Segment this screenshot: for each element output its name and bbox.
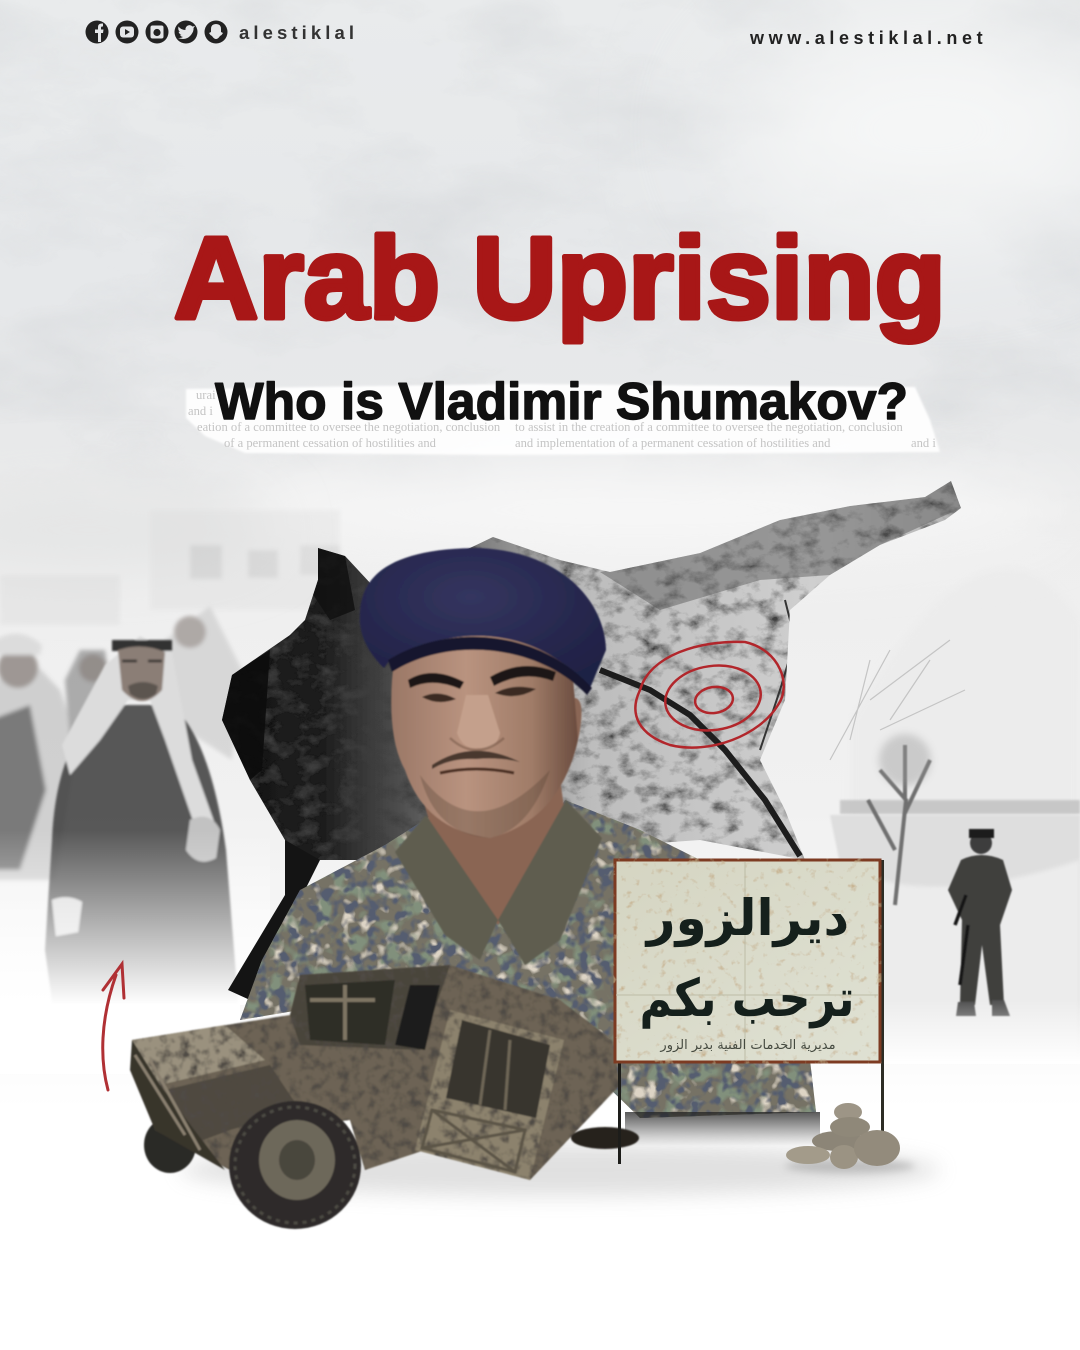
moustache and mouth <box>432 751 520 769</box>
windshield frames <box>305 980 395 1045</box>
front grille <box>130 1040 225 1170</box>
background <box>0 0 1080 920</box>
destroyed humvee <box>130 965 639 1229</box>
collar <box>395 800 602 965</box>
white brush strip with faded article text: to assist in the creation of a committee to oversee the negotiation, conclusion <box>515 420 904 434</box>
white brush strip with faded article text: and i <box>911 436 936 450</box>
uniform <box>240 800 816 1118</box>
subtitle: Who is Vladimir Shumakov? <box>215 373 908 431</box>
rear wheel <box>144 1117 196 1173</box>
icon: youtube <box>116 20 138 44</box>
website url: www.alestiklal.net <box>749 28 987 48</box>
icon: instagram <box>146 20 168 44</box>
faded crowd in traditional dress <box>0 606 270 1074</box>
white brush strip with faded article text: urai <box>196 388 216 402</box>
stubble <box>420 770 550 838</box>
sign text line 1: ديرالزور <box>644 889 849 948</box>
faded buildings behind crowd <box>0 510 340 625</box>
ear <box>562 698 582 760</box>
white brush strip with faded article text: and i <box>188 404 213 418</box>
white brush strip with faded article text: and implementation of a permanent cessation of hostilities and <box>515 436 831 450</box>
white brush strip with faded article text: eation of a committee to oversee the negotiation, conclusion <box>197 420 501 434</box>
road sign: Deir ez-Zor welcomes you <box>615 860 884 1164</box>
door window <box>446 1020 550 1118</box>
title: Arab Uprising <box>174 213 946 343</box>
brows <box>408 666 556 689</box>
icon: facebook <box>86 20 108 44</box>
lower-left map edge behind shoulder <box>228 840 320 1000</box>
red upward arrow <box>103 964 124 1090</box>
white brush strip with faded article text <box>186 384 940 455</box>
map of Syria <box>222 481 961 1000</box>
soldier portrait <box>240 548 820 1146</box>
ground shadow <box>180 1144 940 1196</box>
sign small text: مديرية الخدمات الفنية بدير الزور <box>659 1038 836 1053</box>
white brush strip with faded article text: of a permanent cessation of hostilities and <box>224 436 437 450</box>
red target circles on Deir ez-Zor <box>635 642 784 748</box>
brand name: alestiklal <box>239 22 358 43</box>
shadow below uniform <box>625 1112 820 1146</box>
face <box>391 615 578 838</box>
sign text line 2: ترحب بكم <box>640 969 854 1029</box>
fighter <box>948 829 1012 1016</box>
right side scene: road, trees and armed fighter <box>830 568 1080 1064</box>
beret <box>360 548 606 688</box>
nose <box>457 695 500 748</box>
door lower panel brace <box>422 1110 525 1172</box>
front wheel <box>229 1101 361 1229</box>
pile of rocks <box>785 1103 915 1173</box>
neck <box>420 780 566 925</box>
icon: snapchat <box>204 20 228 44</box>
social media icons <box>86 20 228 44</box>
rear tyre under door <box>571 1127 639 1149</box>
body <box>132 965 620 1180</box>
icon: twitter <box>174 20 198 44</box>
eyes <box>422 687 536 702</box>
